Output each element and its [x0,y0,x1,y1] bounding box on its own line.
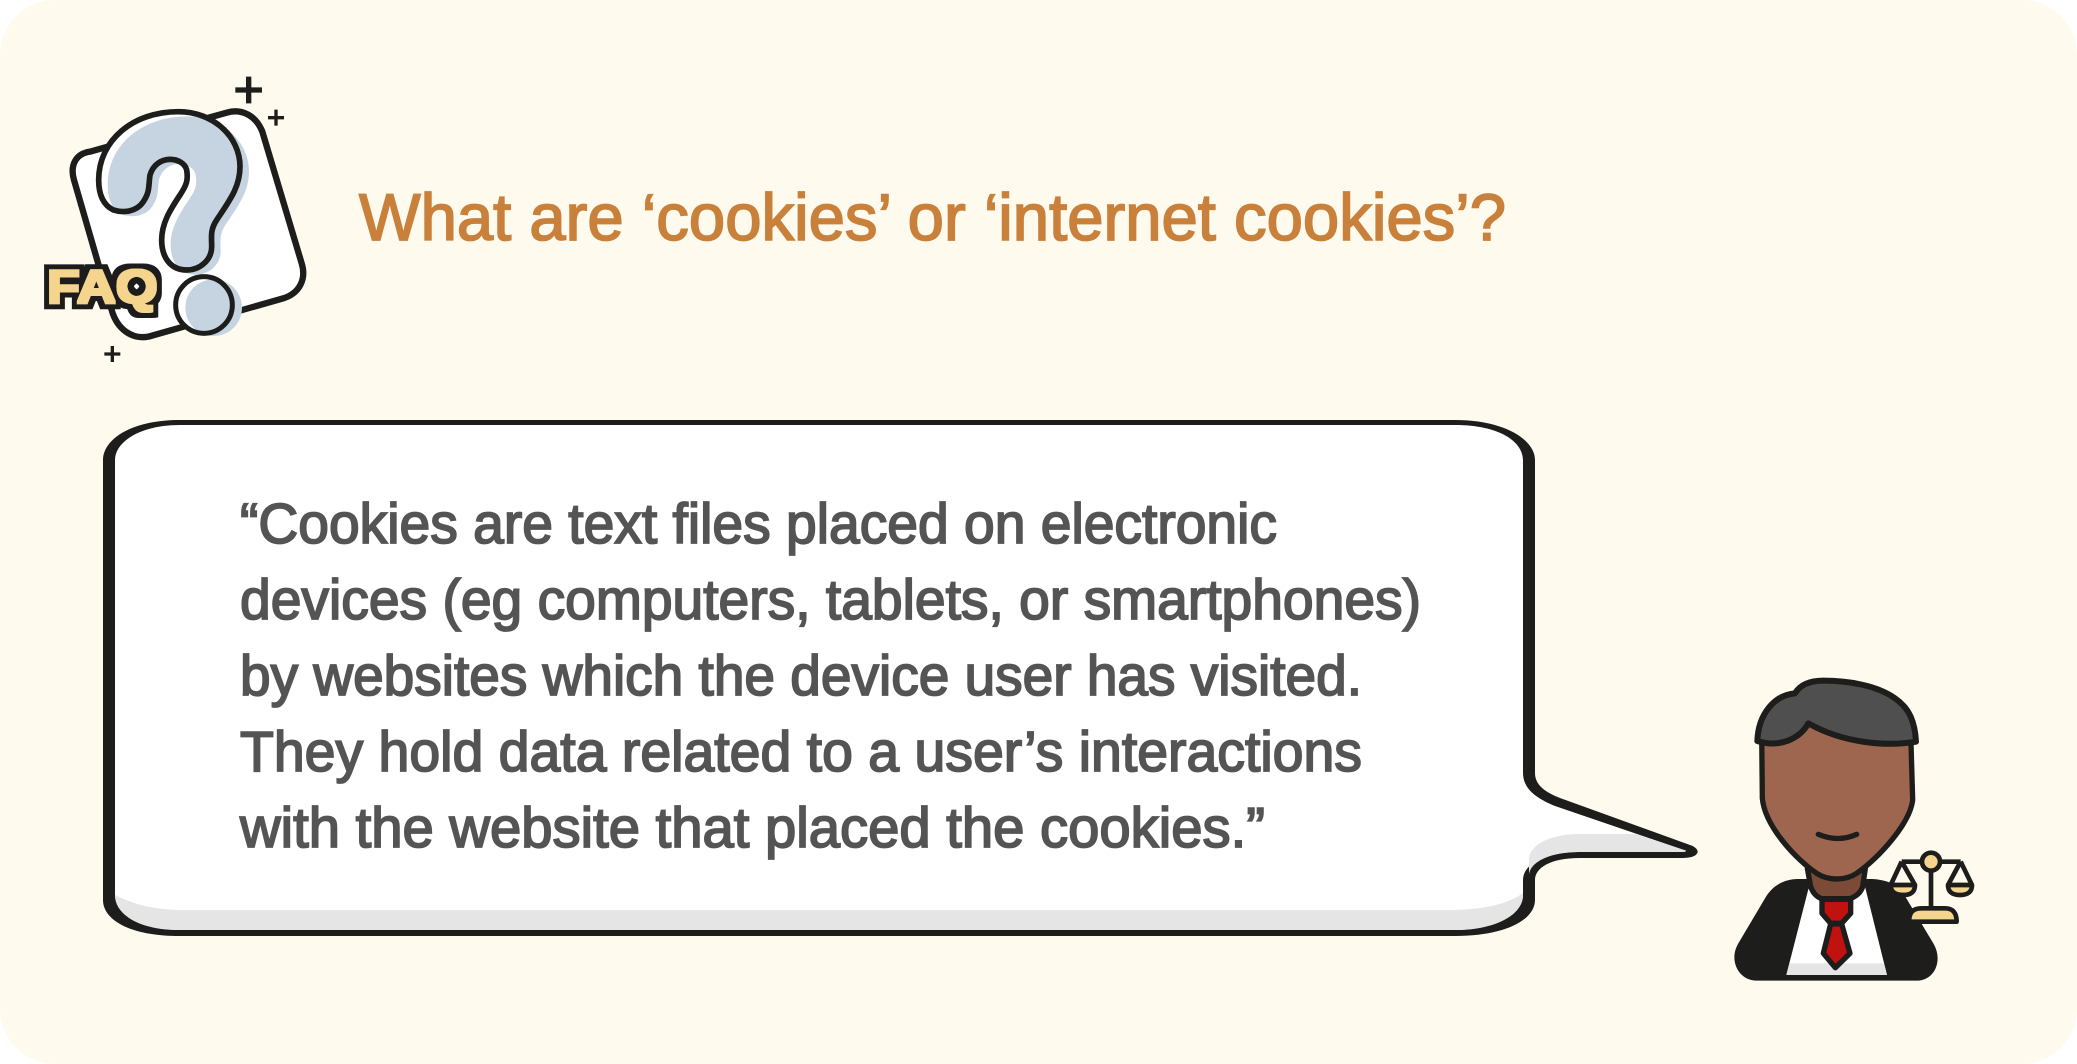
FAQ label: FAQ [47,261,158,313]
scale beam and pole [1891,862,1972,908]
lawyer smile [1818,834,1857,838]
bubble outline [103,420,1698,936]
quote line 3: by websites which the device user has visited. [240,644,1362,708]
icon: sparkle plus bottom [104,346,120,362]
speech bubble [103,420,1698,936]
quote line 4: They hold data related to a user’s interactions [240,720,1362,784]
left pan [1891,885,1915,895]
title: What are ‘cookies’ or ‘internet cookies’? [359,180,1506,254]
icon: sparkle plus small [268,110,284,126]
lawyer tie knot [1822,899,1851,923]
icon: scales of justice [1891,853,1972,922]
quote line 1: “Cookies are text files placed on electronic [240,492,1277,556]
right pan [1948,885,1972,895]
lawyer tie [1823,924,1850,968]
icon: question mark dot [176,277,242,336]
lawyer face [1762,710,1913,879]
quote text [239,492,1421,860]
quote line 5: with the website that placed the cookies.” [239,796,1265,860]
bubble shading tail [1529,834,1686,876]
bubble white interior [115,425,1686,930]
lawyer shirt [1786,887,1887,975]
icon: tilted card [73,111,303,337]
shirt shading [1786,963,1887,975]
icon: FAQ question mark card [47,77,303,362]
scale base [1909,908,1957,922]
icon: lawyer with scales [1734,681,1972,981]
bubble shading bottom [115,893,1523,930]
lawyer hair [1757,681,1916,744]
lawyer jacket [1734,879,1938,981]
icon: question mark [99,112,249,275]
quote line 2: devices (eg computers, tablets, or smartphones) [240,568,1421,632]
lawyer neck [1807,868,1865,899]
icon: sparkle plus large [235,77,262,103]
scale pivot [1922,853,1940,871]
